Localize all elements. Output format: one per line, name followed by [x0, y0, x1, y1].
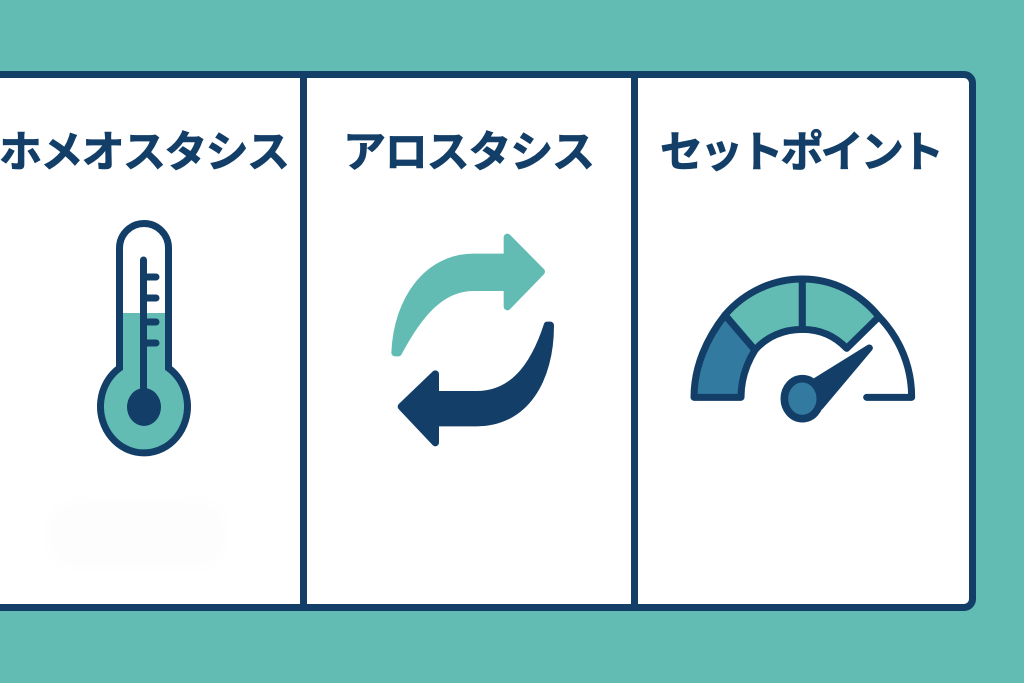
- gauge segment: low: [694, 315, 755, 397]
- panel: three-column card: [0, 74, 972, 608]
- gauge hub: [784, 379, 820, 419]
- arrow: navy return: [401, 325, 550, 443]
- gauge segment: middle: [725, 279, 802, 350]
- icon: thermometer: [97, 220, 191, 456]
- gauge segment: open range: [867, 317, 912, 397]
- icon: gauge: [694, 279, 912, 419]
- heading: homeostasis: ホメオスタシス: [0, 129, 290, 177]
- arrow: teal forward: [395, 237, 541, 353]
- gauge needle: [813, 348, 869, 407]
- icon: cycle arrows: [395, 237, 550, 443]
- heading: set point: セットポイント: [660, 129, 944, 177]
- heading: allostasis: アロスタシス: [343, 129, 595, 177]
- gauge segment: upper: [802, 279, 879, 348]
